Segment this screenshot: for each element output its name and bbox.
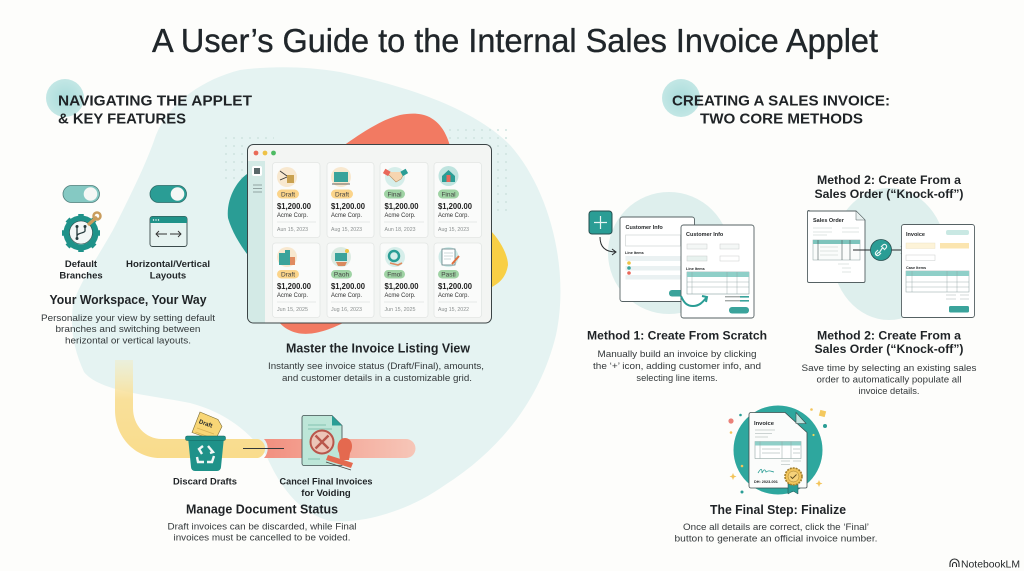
panel: invoice listing bbox=[228, 114, 508, 383]
heading: creating a sales invoice: TWO CORE METHODS bbox=[700, 110, 863, 128]
logo: NotebookLM: NotebookLM bbox=[961, 558, 1020, 570]
icon: toggle default branches bbox=[63, 186, 100, 202]
invoice card 6: $1,200.00 bbox=[331, 282, 366, 291]
heading: navigating the applet: & KEY FEATURES bbox=[58, 110, 186, 128]
form: customer info back bbox=[620, 217, 694, 302]
invoice card 3: Acme Corp. bbox=[384, 212, 416, 219]
decorative confetti bbox=[728, 408, 827, 494]
text: listing description: and customer details in a customizable grid. bbox=[282, 373, 472, 383]
icon: window layout bbox=[150, 216, 187, 246]
label: layouts: Layouts bbox=[150, 270, 186, 282]
doc: sales order: Sales Order bbox=[813, 218, 845, 224]
heading: navigating the applet: NAVIGATING THE APPLET bbox=[58, 92, 252, 110]
flow path red bbox=[264, 439, 416, 458]
label: cancel final invoices bbox=[280, 476, 372, 499]
invoice card 1: $1,200.00 bbox=[277, 202, 312, 211]
heading: creating a sales invoice: CREATING A SALES INVOICE: bbox=[672, 92, 890, 110]
heading: method 2 bottom: Sales Order (“Knock-off”) bbox=[814, 342, 964, 356]
icon: finalize invoice badge: Invoice bbox=[754, 421, 775, 427]
title: A User’s Guide to the Internal Sales Invoice Applet bbox=[152, 22, 878, 59]
text: workspace description: herizontal or vertical layouts. bbox=[65, 336, 191, 346]
text: final step description: button to generate an official invoice number. bbox=[674, 534, 878, 544]
text: final step description bbox=[674, 522, 878, 544]
background blob: method 1 circle bbox=[608, 192, 730, 314]
text: manage description bbox=[168, 522, 356, 542]
label: layouts: Horizontal/Vertical bbox=[126, 259, 210, 270]
dot pattern left bbox=[224, 132, 274, 180]
doc: invoice: Invoice bbox=[906, 232, 925, 238]
invoice card 7: Fmol bbox=[387, 272, 402, 278]
heading: method 1: Method 1: Create From Scratch bbox=[587, 328, 767, 342]
background blob: method 2 circle bbox=[832, 188, 946, 320]
text: method 1 description: the ‘+’ icon, adding customer info, and bbox=[593, 361, 761, 371]
blob: teal bbox=[228, 172, 300, 258]
flow path yellow bbox=[115, 360, 265, 458]
icon: finalize invoice badge bbox=[734, 406, 822, 494]
panel: final step bbox=[674, 406, 878, 544]
form: customer info back: Customer Info bbox=[626, 225, 663, 231]
invoice card 1: Aun 15, 2023 bbox=[277, 227, 308, 233]
invoice card 5: Draft bbox=[281, 272, 295, 278]
invoice card 1 bbox=[272, 162, 320, 238]
invoice card 8: Pastl bbox=[441, 272, 456, 278]
invoice card 6 bbox=[327, 243, 374, 318]
label: default branches bbox=[59, 259, 103, 282]
heading: method 2 top: Method 2: Create From a bbox=[817, 173, 961, 187]
invoice card 7 bbox=[380, 243, 428, 318]
icon: plus button bbox=[589, 211, 612, 234]
doc: sales order bbox=[808, 210, 865, 282]
icon: link bbox=[853, 240, 905, 260]
form: customer info front bbox=[681, 225, 754, 318]
window bbox=[248, 144, 492, 323]
invoice card 8 bbox=[434, 243, 482, 318]
icon: discard bin: Draft bbox=[198, 419, 213, 430]
text: listing description: Instantly see invoice status (Draft/Final), amounts, bbox=[268, 361, 484, 371]
invoice card 5 bbox=[272, 243, 320, 318]
invoice card 7: Jun 15, 2025 bbox=[384, 307, 416, 313]
invoice card 3 bbox=[380, 162, 428, 238]
heading: manage document status: Manage Document Status bbox=[186, 502, 338, 516]
invoice card 2: Aug 15, 2023 bbox=[331, 227, 362, 233]
invoice card 5: Jun 15, 2025 bbox=[277, 307, 308, 313]
invoice card 2 bbox=[327, 162, 374, 238]
text: workspace description bbox=[41, 313, 215, 346]
label: cancel final invoices: Cancel Final Invoices bbox=[280, 476, 372, 488]
heading: method 2 bottom bbox=[814, 328, 964, 356]
form: customer info front: Line Items bbox=[686, 267, 705, 271]
invoice card 3: Aun 18, 2023 bbox=[384, 227, 416, 233]
invoice card 8: Acme Corp. bbox=[438, 292, 469, 299]
invoice card 3: $1,200.00 bbox=[384, 202, 419, 211]
label: cancel final invoices: for Voiding bbox=[301, 488, 351, 499]
icon: toggle layouts bbox=[150, 186, 186, 202]
panel: method 2 bbox=[802, 173, 977, 396]
invoice card 4: Final bbox=[441, 191, 456, 198]
blob: yellow bbox=[490, 230, 508, 288]
blob: coral bbox=[277, 114, 450, 334]
invoice card 3: Final bbox=[387, 191, 402, 198]
text: workspace description: branches and switching between bbox=[56, 324, 200, 334]
invoice card 4: Acme Corp. bbox=[438, 212, 469, 219]
text: method 1 description: selecting line items. bbox=[636, 373, 718, 383]
heading: method 2 bottom: Method 2: Create From a bbox=[817, 328, 961, 342]
invoice card 1: Draft bbox=[281, 191, 295, 198]
invoice card 2: Draft bbox=[335, 191, 349, 198]
invoice card 6: Paoh bbox=[334, 272, 349, 278]
text: method 2 description: order to automatically populate all bbox=[816, 374, 962, 384]
invoice card 1: Acme Corp. bbox=[277, 212, 308, 219]
invoice card 8: Aug 15, 2022 bbox=[438, 307, 469, 313]
panel: method 1 bbox=[587, 211, 767, 383]
text: method 1 description: Manually build an invoice by clicking bbox=[598, 349, 756, 359]
icon: gear with wrench bbox=[62, 212, 100, 252]
text: workspace description: Personalize your view by setting default bbox=[41, 313, 215, 323]
text: manage description: invoices must be cancelled to be voided. bbox=[174, 532, 350, 542]
text: method 2 description bbox=[802, 363, 977, 396]
invoice card 6: Jug 16, 2023 bbox=[331, 307, 362, 313]
heading: creating a sales invoice bbox=[662, 79, 890, 128]
label: layouts bbox=[126, 259, 210, 282]
heading: master the invoice listing view: Master the Invoice Listing View bbox=[286, 342, 470, 356]
invoice card 8: $1,200.00 bbox=[438, 282, 473, 291]
dot pattern right bbox=[420, 128, 510, 216]
text: final step description: Once all details are correct, click the ‘Final’ bbox=[683, 522, 869, 532]
text: method 1 description bbox=[593, 349, 761, 383]
arrow: plus to form bbox=[600, 237, 616, 255]
label: default branches: Branches bbox=[59, 270, 103, 282]
doc: invoice bbox=[902, 224, 974, 318]
invoice card 7: $1,200.00 bbox=[384, 282, 419, 291]
heading: navigating the applet bbox=[46, 79, 252, 128]
invoice card 7: Acme Corp. bbox=[384, 292, 416, 299]
invoice card 4: $1,200.00 bbox=[438, 202, 473, 211]
connector line bbox=[243, 448, 284, 450]
heading: the final step: The Final Step: Finalize bbox=[710, 503, 846, 517]
invoice card 5: $1,200.00 bbox=[277, 282, 312, 291]
invoice card 4: Aug 15, 2023 bbox=[438, 227, 469, 233]
text: manage description: Draft invoices can be discarded, while Final bbox=[168, 522, 356, 532]
panel: manage document status bbox=[115, 360, 416, 542]
background blob: left section bbox=[72, 67, 560, 521]
invoice card 2: $1,200.00 bbox=[331, 202, 366, 211]
label: default branches: Default bbox=[65, 259, 98, 270]
icon: finalize invoice badge: DH: 2023-001 bbox=[754, 480, 778, 484]
icon: discard bin bbox=[186, 412, 226, 471]
doc: invoice: Case Items bbox=[906, 266, 926, 270]
invoice card 6: Acme Corp. bbox=[331, 292, 362, 299]
heading: your workspace: Your Workspace, Your Way bbox=[50, 292, 207, 307]
icon: cancel document with stamp bbox=[302, 416, 353, 470]
heading: method 2 top: Sales Order (“Knock-off”) bbox=[814, 187, 964, 201]
heading: method 2 top bbox=[814, 173, 964, 201]
text: listing description bbox=[268, 361, 484, 383]
invoice card 4 bbox=[434, 162, 482, 238]
panel: workspace bbox=[41, 186, 215, 346]
text: method 2 description: invoice details. bbox=[859, 386, 919, 396]
form: customer info back: Line Items bbox=[625, 251, 644, 255]
arrow: teal bbox=[681, 296, 707, 306]
invoice card 5: Acme Corp. bbox=[277, 292, 308, 299]
text: method 2 description: Save time by selecting an existing sales bbox=[802, 363, 977, 373]
form: customer info front: Customer Info bbox=[686, 232, 724, 238]
invoice card 2: Acme Corp. bbox=[331, 212, 362, 219]
label: discard drafts: Discard Drafts bbox=[173, 476, 237, 488]
